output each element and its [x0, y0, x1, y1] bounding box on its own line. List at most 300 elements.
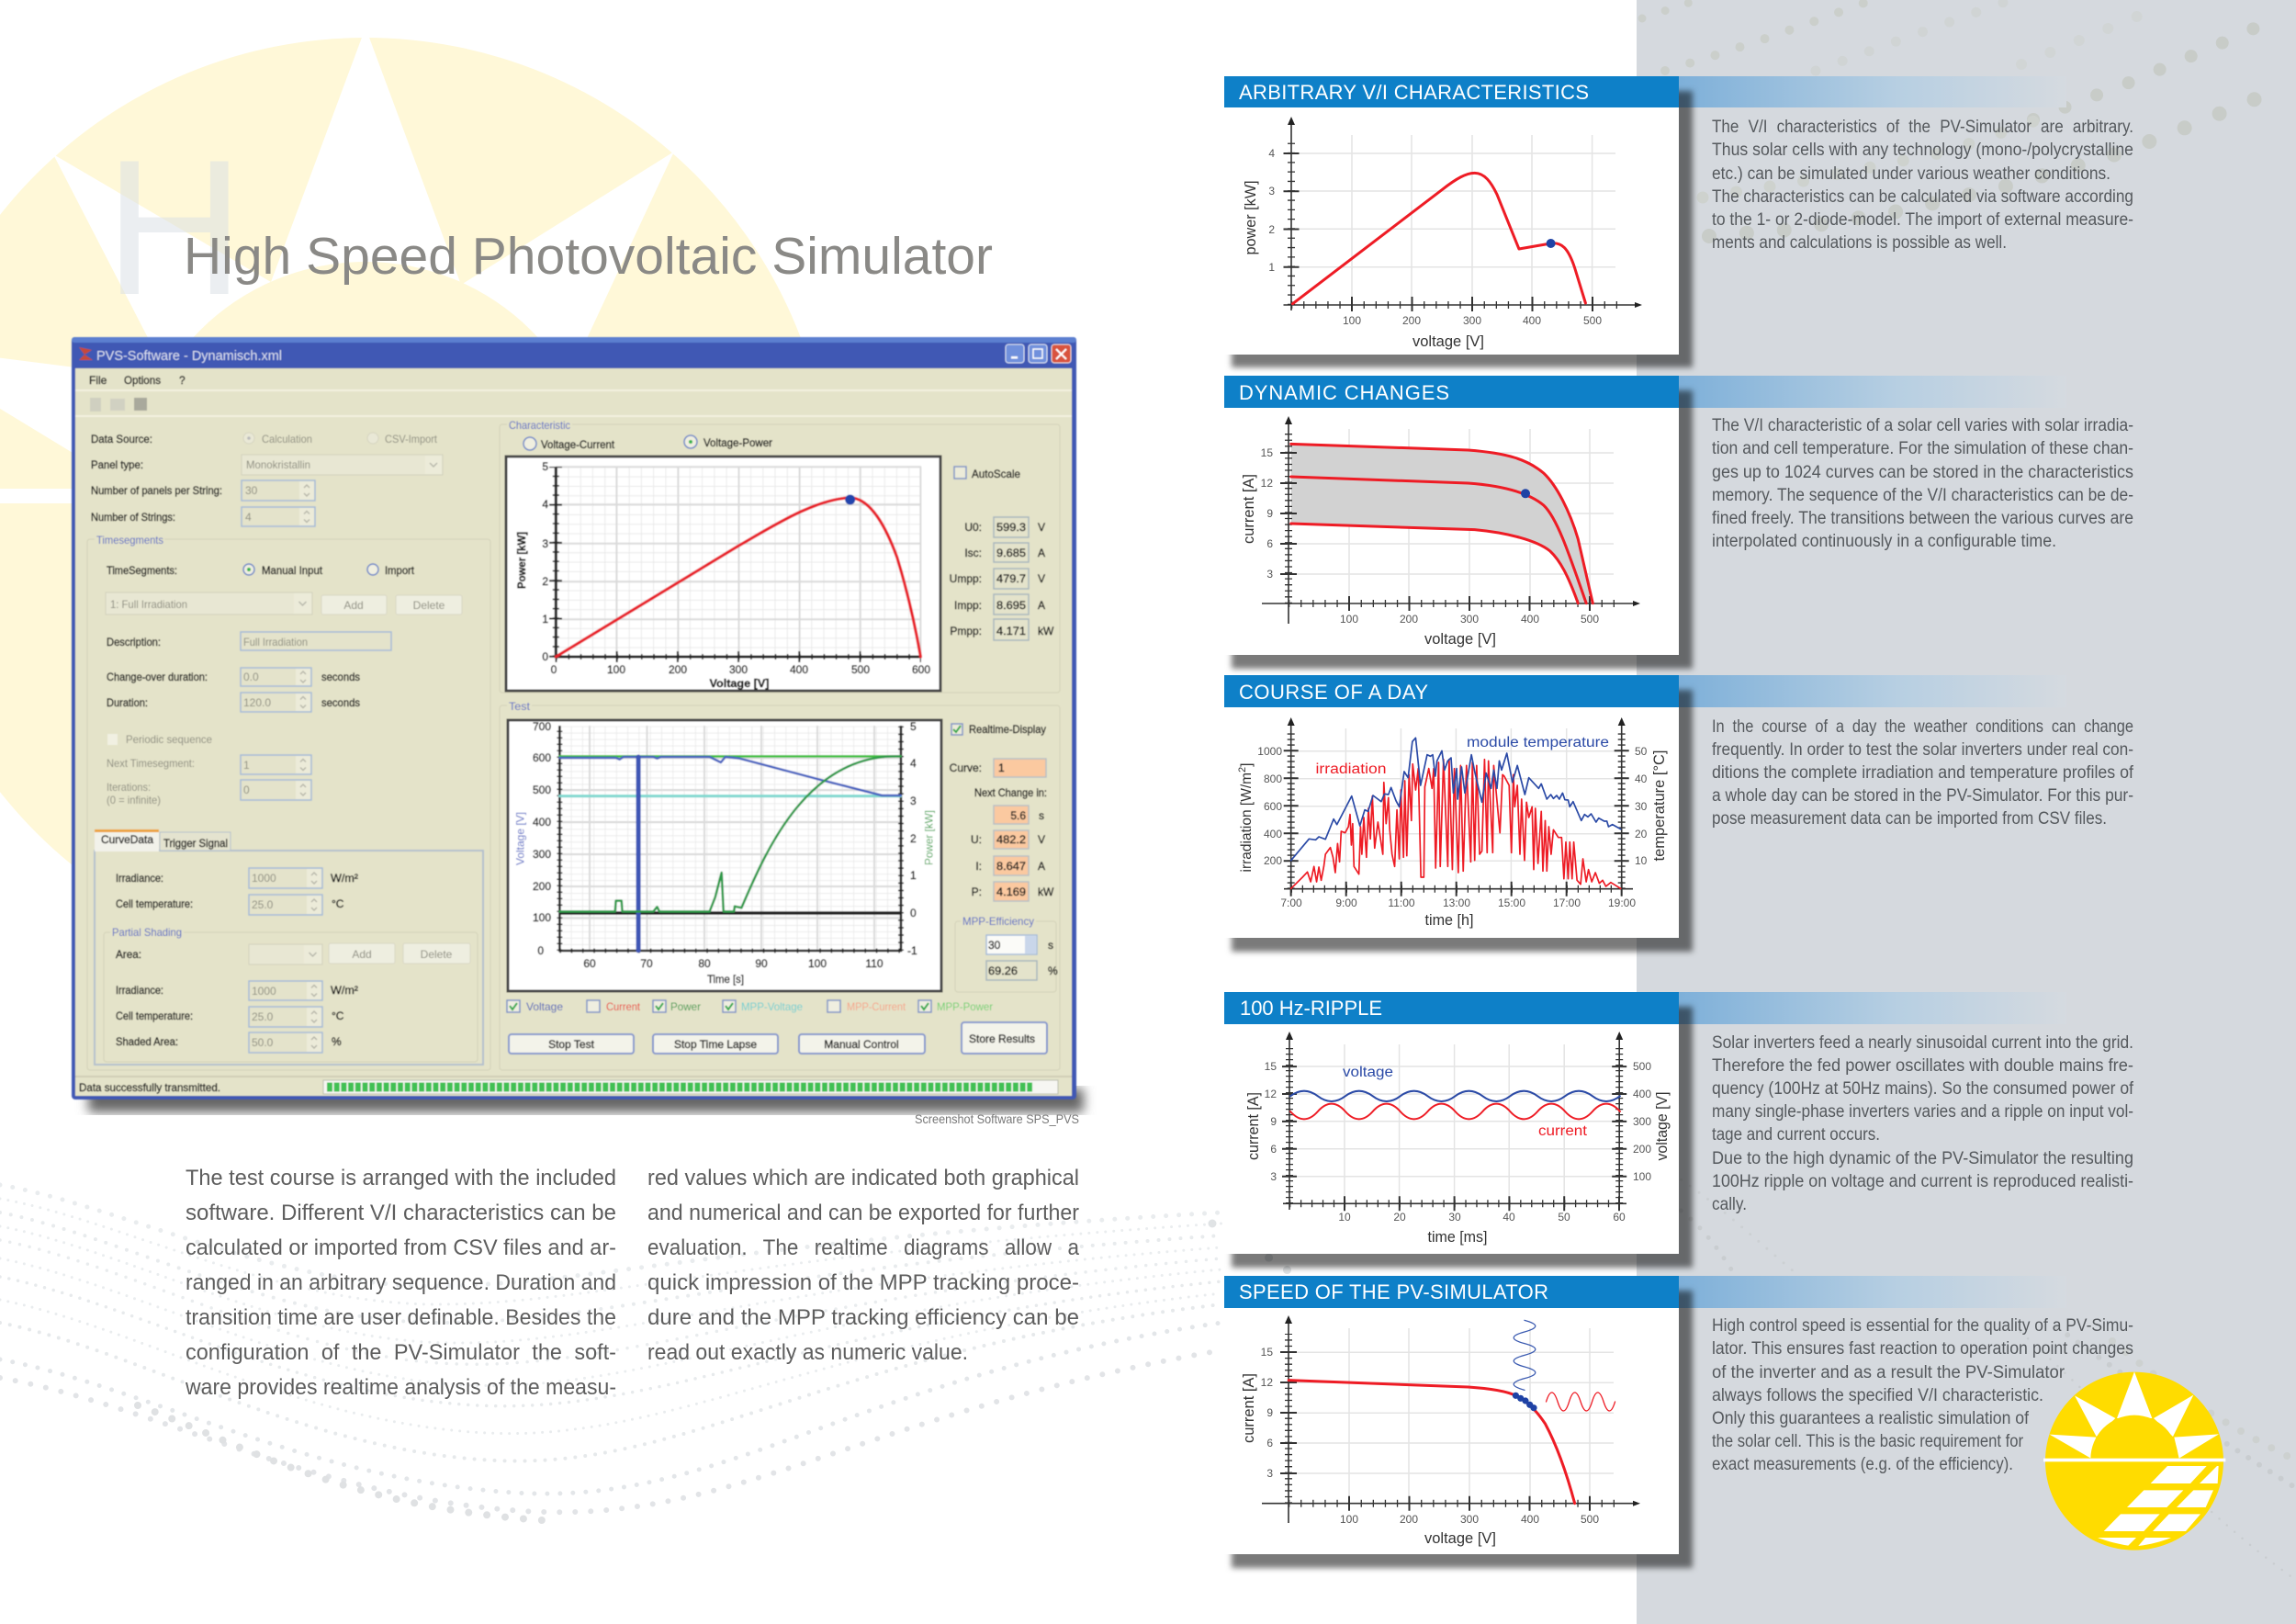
characteristic chart: 300: [729, 663, 748, 676]
characteristic group: Characteristic: [509, 419, 570, 432]
timesegments group: 1: [243, 759, 250, 772]
ripple chart: 15: [1265, 1060, 1277, 1073]
realtime display values: 8.647: [996, 860, 1026, 873]
status bar and progress: [75, 1077, 1072, 1094]
timesegments group: seconds: [321, 671, 360, 683]
irradiation and temperature chart: 30: [1635, 800, 1648, 813]
operating point dots: [1513, 1393, 1537, 1411]
text: arbitrary V/I characteristics: The V/I characteristics of the PV-Simulator are arbitrary.: [1712, 118, 2133, 137]
power-voltage chart: 500: [1583, 314, 1602, 327]
body text column 2: quick impression of the MPP tracking proce-: [647, 1270, 1079, 1295]
text: arbitrary V/I characteristics: [1712, 118, 2133, 253]
test time chart: 80: [698, 957, 711, 970]
characteristic chart: 3: [542, 537, 548, 550]
timesegments group: (0 = infinite): [107, 794, 161, 806]
curve data tab page: W/m²: [331, 872, 358, 885]
menu bar and toolbar: ?: [179, 374, 186, 387]
irradiation and temperature chart: 1000: [1257, 745, 1282, 758]
body text column 1: ranged in an arbitrary sequence. Duration and: [186, 1270, 616, 1295]
right grey panel: [1637, 0, 2296, 1624]
text: speed of the PV-simulator: of the inverter and as a result the PV-Simulator: [1712, 1363, 2065, 1382]
ripple chart: 500: [1633, 1060, 1651, 1073]
curve data tab page: 1000: [252, 872, 276, 885]
test time chart: Power [kW]: [922, 810, 935, 865]
timesegments group: Iterations:: [107, 781, 151, 794]
left settings column: Panel type:: [91, 458, 143, 471]
power-voltage chart: 2: [1268, 223, 1275, 236]
panel: dynamic changes: [1224, 376, 1679, 655]
characteristic chart: 0: [551, 663, 557, 676]
ripple chart: current [A]: [1245, 1092, 1262, 1160]
realtime display values: Realtime-Display: [969, 723, 1046, 736]
body text column 2: red values which are indicated both graphical: [647, 1166, 1079, 1190]
speed chart: 400: [1521, 1513, 1539, 1526]
screenshot caption: Screenshot Software SPS_PVS: [915, 1111, 1079, 1126]
characteristic values: 479.7: [996, 572, 1026, 585]
title: High Speed Photovoltaic Simulator: [184, 227, 993, 286]
timesegments group: 0: [243, 784, 250, 796]
realtime display values: 482.2: [996, 833, 1026, 846]
characteristic values: V: [1038, 572, 1045, 585]
test time chart: -1: [907, 944, 917, 957]
curve data tab page: Add: [352, 948, 372, 961]
panel: course of a day: [1224, 675, 1679, 938]
ripple chart: 50: [1558, 1211, 1570, 1224]
timesegments group: Timesegments: [96, 534, 163, 547]
speed chart: 6: [1266, 1437, 1273, 1449]
body text column 1: configuration of the PV-Simulator the soft-: [186, 1340, 616, 1365]
curve data tab page: Cell temperature:: [116, 1009, 193, 1022]
speed chart: 3: [1266, 1467, 1273, 1480]
power-voltage chart: voltage [V]: [1412, 333, 1484, 350]
text: dynamic changes: [1712, 416, 2133, 551]
test time chart: 100: [808, 957, 827, 970]
text: 100 Hz ripple: cally.: [1712, 1195, 1747, 1214]
ripple chart: 200: [1633, 1143, 1651, 1156]
test group: Test: [509, 700, 531, 713]
text: course of a day: ditions the complete irradiation and temperature profiles of: [1712, 763, 2134, 783]
left settings column: CSV-Import: [385, 433, 438, 445]
irradiation and temperature chart: 50: [1635, 745, 1648, 758]
characteristic values: 9.685: [996, 547, 1026, 559]
irradiation and temperature chart: 13:00: [1443, 897, 1470, 909]
irradiation and temperature chart: 10: [1635, 854, 1648, 867]
irradiation and temperature chart: 800: [1264, 773, 1282, 785]
realtime display values: kW: [1038, 885, 1054, 898]
characteristic values: V: [1038, 521, 1045, 534]
panel: 100 Hz ripple: [1224, 992, 1679, 1254]
realtime display values: 1: [998, 761, 1005, 774]
irradiation and temperature chart: 20: [1635, 828, 1648, 840]
left settings column: Data Source:: [91, 433, 152, 445]
text: 100 Hz ripple: quency (100Hz at 50Hz mains). So the consumed power of: [1712, 1079, 2134, 1099]
current-voltage family chart: 3: [1266, 568, 1273, 581]
test time chart: [508, 720, 941, 991]
characteristic values: Umpp:: [950, 572, 982, 585]
text: course of a day: pose measurement data can be imported from CSV files.: [1712, 809, 2107, 829]
test time chart: 0: [910, 907, 917, 919]
MPP efficiency: MPP-Efficiency: [962, 915, 1034, 928]
realtime display values: [950, 723, 1054, 901]
text: 100 Hz ripple: Therefore the fed power oscillates with double mains fre-: [1712, 1056, 2133, 1076]
irradiation and temperature chart: 19:00: [1608, 897, 1636, 909]
irradiation and temperature chart: ]: [1239, 763, 1255, 767]
power-voltage chart: power [kW]: [1243, 180, 1259, 255]
curve data tab page: Trigger Signal: [163, 837, 228, 850]
text: course of a day: a whole day can be stored in the PV-Simulator. For this pur-: [1712, 786, 2133, 806]
power-voltage chart: 300: [1463, 314, 1481, 327]
text: 100 Hz ripple: [1712, 1033, 2134, 1214]
characteristic values: Pmpp:: [950, 625, 982, 637]
action buttons: Stop Test: [548, 1038, 595, 1051]
characteristic values: Impp:: [954, 599, 982, 612]
timesegments group: TimeSegments:: [107, 564, 177, 577]
characteristic values: [950, 467, 1054, 640]
power-voltage chart: 4: [1268, 147, 1275, 160]
test time chart: 400: [533, 816, 551, 829]
timesegments group: 1: Full Irradiation: [110, 598, 187, 611]
timesegments group: 120.0: [243, 696, 271, 709]
text: speed of the PV-simulator: always follows the specified V/I characteristic.: [1712, 1386, 2043, 1405]
series checkboxes: Power: [670, 1000, 701, 1013]
curve data tab page: 50.0: [252, 1036, 274, 1049]
speed chart: 500: [1581, 1513, 1599, 1526]
text: arbitrary V/I characteristics: ments and calculations is possible as well.: [1712, 233, 2007, 253]
irradiation and temperature chart: 17:00: [1553, 897, 1581, 909]
text: arbitrary V/I characteristics: to the 1- or 2-diode-model. The import of external measure-: [1712, 210, 2133, 230]
characteristic chart: [506, 457, 940, 691]
timesegments group: Change-over duration:: [107, 671, 208, 683]
irradiation and temperature chart: 40: [1635, 773, 1648, 785]
timesegments group: Import: [385, 564, 415, 577]
curve data tab page: %: [332, 1035, 342, 1048]
text: speed of the PV-simulator: the solar cell. This is the basic requirement for: [1712, 1432, 2024, 1451]
speed chart: 100: [1340, 1513, 1358, 1526]
curve data tab page: Delete: [421, 948, 453, 961]
panel shadows: [1232, 91, 1693, 1568]
test group: [500, 700, 1060, 1070]
current-voltage family chart: 15: [1261, 446, 1273, 459]
ripple chart: 300: [1633, 1115, 1651, 1128]
test time chart: 110: [865, 957, 884, 970]
big ghost letter H: H: [105, 119, 244, 335]
test time chart: 1: [910, 869, 917, 882]
text: arbitrary V/I characteristics: etc.) can be simulated under various weather conditions.: [1712, 164, 2110, 184]
power-voltage chart: 1: [1268, 261, 1275, 274]
characteristic values: Isc:: [964, 547, 982, 559]
current-voltage family chart: current [A]: [1241, 474, 1257, 544]
characteristic chart: 400: [790, 663, 808, 676]
characteristic values: 8.695: [996, 599, 1026, 612]
series checkboxes: Current: [606, 1000, 641, 1013]
characteristic chart: 1: [542, 613, 548, 626]
realtime display values: Curve:: [950, 761, 982, 774]
speed chart: [1241, 1315, 1640, 1547]
current-voltage family chart: [1241, 416, 1640, 648]
heading: 100 Hz-RIPPLE: [1240, 997, 1382, 1020]
ripple chart: 400: [1633, 1088, 1651, 1100]
curve data tab page: Irradiance:: [116, 872, 163, 885]
characteristic values: A: [1038, 547, 1045, 559]
MPP efficiency: 69.26: [988, 964, 1018, 977]
text: 100 Hz ripple: 100Hz ripple on voltage and current is reproduced realisti-: [1712, 1172, 2133, 1191]
body text column 2: read out exactly as numeric value.: [647, 1340, 968, 1365]
irradiation and temperature chart: 7:00: [1280, 897, 1302, 909]
text: dynamic changes: fined freely. The transitions between the various curves are: [1712, 509, 2133, 528]
curve data tab page: Partial Shading: [112, 926, 182, 939]
irradiation and temperature chart: 2: [1237, 767, 1248, 773]
text: speed of the PV-simulator: Only this guarantees a realistic simulation of: [1712, 1409, 2030, 1428]
text: speed of the PV-simulator: [1712, 1316, 2133, 1474]
window frame and client area: [72, 337, 1076, 1100]
irradiation and temperature chart: [1237, 717, 1668, 929]
menu bar and toolbar: Options: [124, 374, 161, 387]
realtime display values: Next Change in:: [974, 786, 1047, 799]
left settings column: 30: [245, 484, 258, 497]
characteristic chart: 100: [607, 663, 625, 676]
curve data tab page: W/m²: [331, 984, 358, 997]
timesegments group: seconds: [321, 696, 360, 709]
text: dynamic changes: tion and cell temperature. For the simulation of these chan-: [1712, 439, 2133, 458]
title bar: PVS-Software - Dynamisch.xml: [96, 348, 282, 364]
irradiation and temperature chart: 15:00: [1498, 897, 1525, 909]
body text column 1: transition time are user definable. Besides the: [186, 1305, 616, 1330]
characteristic chart: 200: [669, 663, 687, 676]
speed chart: 300: [1460, 1513, 1479, 1526]
irradiation and temperature chart: irradiation: [1315, 761, 1387, 777]
characteristic chart: 4: [542, 498, 548, 511]
ripple chart: [1245, 1032, 1671, 1246]
ripple chart: 10: [1338, 1211, 1351, 1224]
power-voltage chart: 200: [1402, 314, 1421, 327]
characteristic chart: 2: [542, 575, 548, 588]
test time chart: 2: [910, 832, 917, 845]
realtime display values: A: [1038, 860, 1045, 873]
text: 100 Hz ripple: Solar inverters feed a nearly sinusoidal current into the grid.: [1712, 1033, 2133, 1053]
software screenshot window: [72, 337, 1084, 1112]
characteristic chart: 600: [912, 663, 930, 676]
action buttons: Stop Time Lapse: [674, 1038, 757, 1051]
test time chart: 500: [533, 784, 551, 796]
test time chart: 700: [533, 720, 551, 733]
series checkboxes: MPP-Voltage: [741, 1000, 803, 1013]
curve data tab page: Irradiance:: [116, 984, 163, 997]
body text column 2: [647, 1166, 1080, 1365]
text: dynamic changes: interpolated continuously in a configurable time.: [1712, 532, 2056, 551]
current-voltage family chart: 12: [1261, 477, 1273, 490]
ripple chart: 12: [1265, 1088, 1277, 1100]
characteristic values: A: [1038, 599, 1045, 612]
text: arbitrary V/I characteristics: The characteristics can be calculated via software according: [1712, 187, 2133, 207]
spinner and combo arrows: [299, 463, 437, 1048]
curve data tab page: °C: [332, 1009, 344, 1022]
series checkboxes: [507, 1000, 993, 1013]
curve data tab page: 25.0: [252, 1010, 274, 1023]
text: dynamic changes: The V/I characteristic of a solar cell varies with solar irradia-: [1712, 416, 2133, 435]
speed chart: 12: [1261, 1376, 1273, 1389]
irradiation and temperature chart: 9:00: [1335, 897, 1357, 909]
irradiation and temperature chart: 600: [1264, 800, 1282, 813]
realtime display values: s: [1039, 809, 1044, 822]
icon: sun and solar panel logo: [2043, 1371, 2225, 1551]
realtime display values: 5.6: [1010, 809, 1026, 822]
realtime display values: 4.169: [996, 885, 1026, 898]
text: speed of the PV-simulator: lator. This ensures fast reaction to operation point changes: [1712, 1339, 2133, 1359]
test time chart: 0: [537, 944, 544, 957]
curve data tab page: °C: [332, 897, 344, 910]
irradiation and temperature chart: temperature [°C]: [1651, 750, 1668, 862]
current-voltage family chart: 200: [1400, 613, 1418, 626]
action buttons: Manual Control: [824, 1038, 899, 1051]
text: dynamic changes: memory. The sequence of the V/I characteristics can be de-: [1712, 486, 2133, 505]
timesegments group: Duration:: [107, 696, 148, 709]
test time chart: 4: [910, 757, 917, 770]
test time chart: Voltage [V]: [514, 812, 527, 865]
curve data tab page: 1000: [252, 985, 276, 998]
MPP efficiency: %: [1048, 964, 1058, 977]
ripple chart: 30: [1448, 1211, 1461, 1224]
body text column 2: evaluation. The realtime diagrams allow a: [647, 1235, 1080, 1260]
heading: COURSE OF A DAY: [1239, 681, 1428, 704]
left settings column: Number of panels per String:: [91, 484, 222, 497]
panel: arbitrary V/I characteristics: [1224, 76, 1679, 355]
status bar and progress: Data successfully transmitted.: [79, 1081, 220, 1094]
test time chart: 300: [533, 848, 551, 861]
irradiation and temperature chart: 200: [1264, 854, 1282, 867]
timesegments group: [87, 534, 490, 1070]
irradiation and temperature chart: 11:00: [1388, 897, 1415, 909]
timesegments group: Description:: [107, 636, 161, 648]
left settings column: Calculation: [262, 433, 312, 445]
body text column 2: dure and the MPP tracking efficiency can be: [647, 1305, 1079, 1330]
timesegments group: Full Irradiation: [243, 636, 308, 648]
ripple chart: 3: [1270, 1170, 1277, 1183]
text: course of a day: frequently. In order to test the solar inverters under real con-: [1712, 740, 2133, 760]
power-voltage chart: 400: [1523, 314, 1541, 327]
ripple chart: 6: [1270, 1143, 1277, 1156]
text: arbitrary V/I characteristics: Thus solar cells with any technology (mono-/polycrystalline: [1712, 141, 2133, 160]
realtime display values: U:: [971, 833, 982, 846]
power-voltage chart: 3: [1268, 185, 1275, 197]
timesegments group: Manual Input: [262, 564, 323, 577]
characteristic chart: Power [kW]: [515, 532, 528, 589]
series checkboxes: MPP-Current: [847, 1000, 906, 1013]
body text column 1: software. Different V/I characteristics can be: [186, 1201, 616, 1225]
timesegments group: Next Timesegment:: [107, 757, 195, 770]
text: 100 Hz ripple: tage and current occurs.: [1712, 1125, 1880, 1145]
test time chart: 70: [640, 957, 653, 970]
speed chart: 15: [1261, 1346, 1273, 1359]
irradiation and temperature chart: 400: [1264, 828, 1282, 840]
realtime display values: P:: [972, 885, 982, 898]
irradiation and temperature chart: time [h]: [1425, 912, 1473, 929]
left settings column: Monokristallin: [246, 458, 310, 471]
series checkboxes: Voltage: [526, 1000, 563, 1013]
ripple chart: voltage [V]: [1654, 1091, 1671, 1161]
series checkboxes: MPP-Power: [937, 1000, 993, 1013]
ripple chart: time [ms]: [1427, 1229, 1488, 1246]
characteristic values: kW: [1038, 625, 1054, 637]
speed chart: 9: [1266, 1406, 1273, 1419]
menu bar and toolbar: File: [89, 374, 107, 387]
timesegments group: Periodic sequence: [126, 733, 212, 746]
body text column 1: [185, 1166, 616, 1400]
ripple chart: 20: [1393, 1211, 1406, 1224]
test time chart: 600: [533, 751, 551, 764]
body text column 2: and numerical and can be exported for further: [647, 1201, 1079, 1225]
current-voltage family chart: 100: [1340, 613, 1358, 626]
current-voltage family chart: 6: [1266, 537, 1273, 550]
text: course of a day: [1712, 717, 2134, 829]
test time chart: 5: [910, 720, 917, 733]
background: dotted waves on white: [0, 1185, 1290, 1520]
heading: ARBITRARY V/I CHARACTERISTICS: [1239, 81, 1589, 104]
characteristic values: 599.3: [996, 521, 1026, 534]
characteristic group: [500, 419, 1060, 693]
speed chart: current [A]: [1241, 1373, 1257, 1443]
test time chart: Time [s]: [707, 973, 744, 986]
characteristic values: AutoScale: [972, 468, 1020, 480]
body text column 1: The test course is arranged with the included: [186, 1166, 616, 1190]
test time chart: 100: [533, 911, 551, 924]
test time chart: 200: [533, 880, 551, 893]
speed chart: 200: [1400, 1513, 1418, 1526]
left settings column: 4: [245, 511, 252, 524]
curve data tab page: [95, 829, 483, 1065]
current-voltage family chart: 500: [1581, 613, 1599, 626]
current-voltage family chart: voltage [V]: [1424, 631, 1496, 648]
characteristic chart: 0: [542, 650, 548, 663]
ripple chart: current: [1538, 1123, 1588, 1139]
characteristic group: Voltage-Power: [703, 436, 772, 449]
test time chart: 3: [910, 795, 917, 807]
panel: speed of the PV-simulator: [1224, 1276, 1679, 1554]
characteristic chart: 500: [851, 663, 870, 676]
ripple chart: 60: [1613, 1211, 1626, 1224]
MPP efficiency: [955, 915, 1058, 992]
characteristic chart: 5: [542, 460, 548, 473]
window drop shadow: [88, 1088, 1084, 1112]
timesegments group: Add: [343, 599, 364, 612]
action buttons: [509, 1022, 1047, 1054]
ripple chart: 9: [1270, 1115, 1277, 1128]
realtime display values: I:: [975, 860, 982, 873]
text: 100 Hz ripple: Due to the high dynamic of the PV-Simulator the resulting: [1712, 1149, 2133, 1168]
test time chart: 90: [755, 957, 768, 970]
speed chart: voltage [V]: [1424, 1530, 1496, 1547]
action buttons: Store Results: [969, 1032, 1035, 1045]
curve data tab page: CurveData: [101, 833, 153, 846]
background: pale sun watermark: [0, 28, 831, 969]
curve data tab page: Cell temperature:: [116, 897, 193, 910]
MPP efficiency: s: [1048, 939, 1053, 952]
ripple chart: 100: [1633, 1170, 1651, 1183]
current-voltage family chart: 400: [1521, 613, 1539, 626]
left settings column: [91, 433, 443, 526]
timesegments group: Delete: [413, 599, 445, 612]
text: 100 Hz ripple: many single-phase inverters varies and a ripple on input vol-: [1712, 1102, 2133, 1122]
test time chart: 60: [583, 957, 596, 970]
text: speed of the PV-simulator: High control speed is essential for the quality of a PV-Simu-: [1712, 1316, 2133, 1336]
realtime display values: V: [1038, 833, 1045, 846]
body text column 1: calculated or imported from CSV files and ar-: [186, 1235, 616, 1260]
text: dynamic changes: ges up to 1024 curves can be stored in the characteristics: [1712, 463, 2133, 482]
header gradient strips: [1224, 76, 2066, 1308]
menu bar and toolbar: [75, 374, 1072, 416]
irradiation and temperature chart: module temperature: [1467, 735, 1609, 750]
timesegments group: 0.0: [243, 671, 259, 683]
irradiation and temperature chart: irradiation [W/m: [1239, 773, 1255, 872]
